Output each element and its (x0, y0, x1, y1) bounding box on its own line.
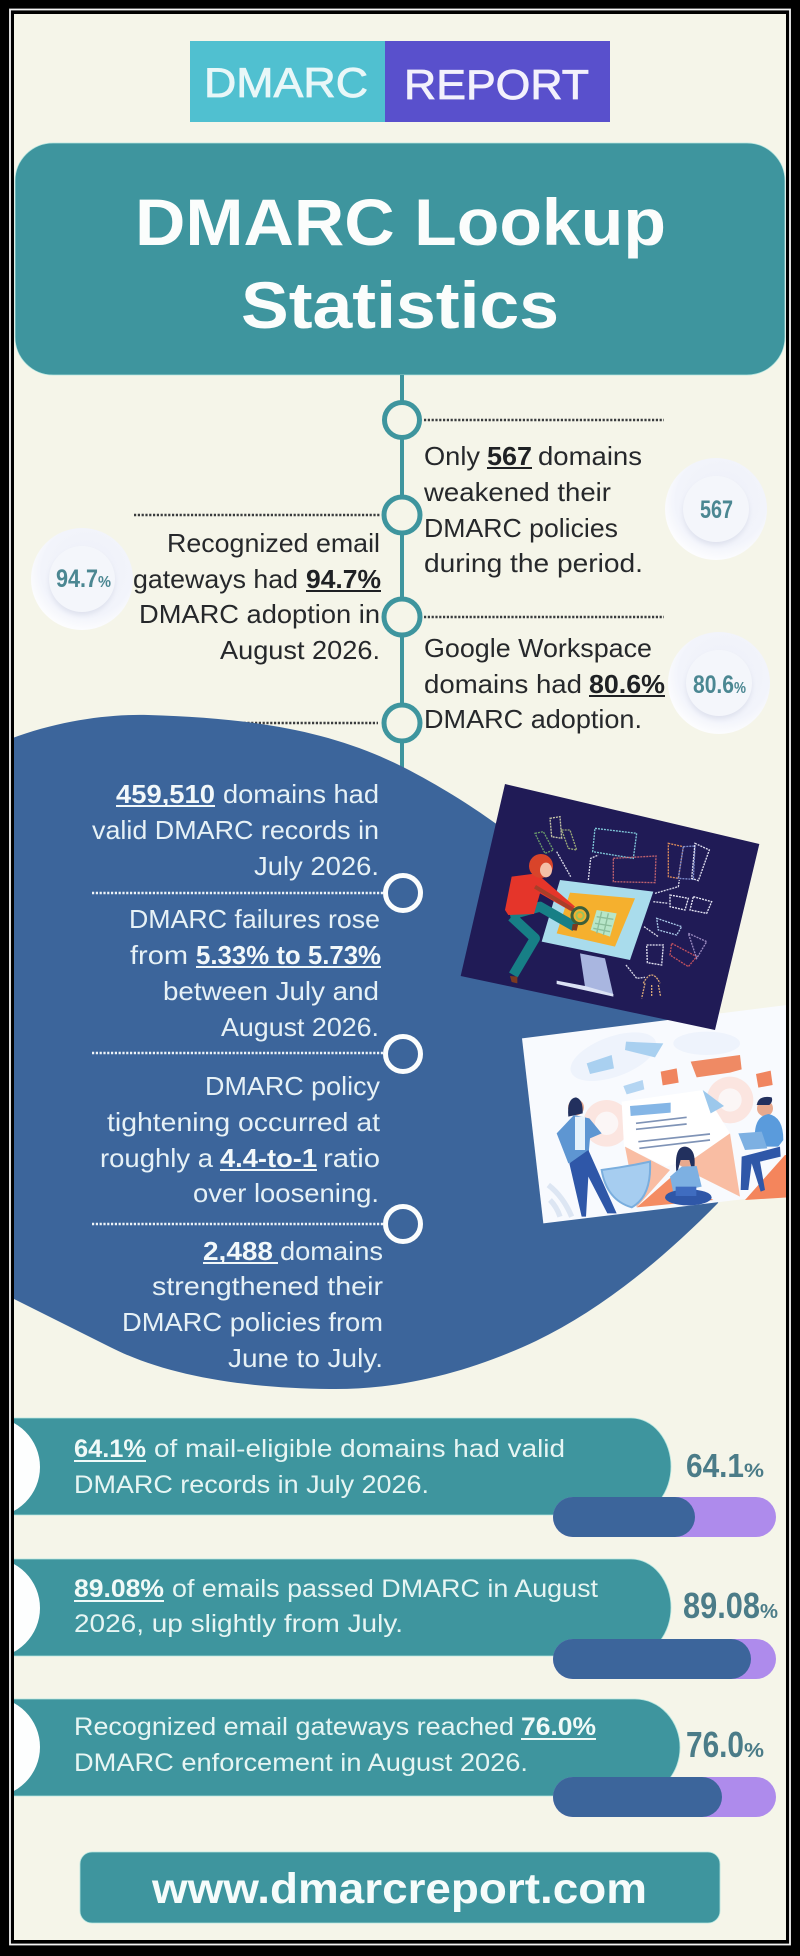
man on box (738, 1097, 783, 1192)
stat bar 1 (0, 1417, 671, 1517)
title: Statistics (241, 268, 559, 342)
bullet marker (0, 1697, 40, 1797)
bullet marker (0, 1417, 40, 1517)
stat: 567 domains weakened: 567 (487, 441, 532, 471)
stat: 80.6% Google Workspace: domains had (424, 669, 582, 699)
timeline in blue panel (92, 876, 420, 1242)
plate: 80.6%: % (734, 680, 746, 697)
stat: 2,488 strengthened: domains (280, 1236, 383, 1266)
progress bar 89.08% (553, 1639, 776, 1679)
stat: 459,510 valid records: domains had (223, 779, 379, 809)
stat bar 1: DMARC records in July 2026. (74, 1471, 429, 1499)
stat: 80.6% Google Workspace: Google Workspace (424, 633, 652, 663)
stat: DMARC failures rose: DMARC failures rose (129, 904, 380, 934)
timeline upper (134, 375, 664, 775)
value label 89.08%: % (760, 1601, 778, 1623)
stat: tightening ratio: ratio (323, 1143, 380, 1173)
stat bar 1: of mail-eligible domains had valid (154, 1435, 565, 1463)
stat: tightening ratio: 4.4-to-1 (220, 1143, 317, 1173)
stat: 459,510 valid records: 459,510 (116, 779, 215, 809)
illustration: team and email security (522, 1003, 800, 1223)
plate: 94.7% (31, 528, 133, 630)
stat bar 3: Recognized email gateways reached (74, 1713, 514, 1741)
stat bar 3: 76.0% (521, 1713, 596, 1741)
woman standing (557, 1097, 617, 1217)
stat: 94.7% gateways adoption: August 2026. (220, 635, 380, 665)
logo: REPORT (404, 61, 589, 108)
stat: 2,488 strengthened: DMARC policies from (122, 1307, 383, 1337)
stat: 2,488 strengthened: strengthened their (152, 1271, 383, 1301)
value label 64.1%: 64.1 (686, 1447, 744, 1484)
stat: DMARC failures rose: August 2026. (221, 1012, 379, 1042)
stat: 94.7% gateways adoption: Recognized email (167, 528, 380, 558)
stat: DMARC failures rose (129, 904, 381, 1042)
stat bar 2: 89.08% (74, 1575, 164, 1603)
stat bar 3: DMARC enforcement in August 2026. (74, 1749, 528, 1777)
stat: 2,488 strengthened (122, 1236, 383, 1373)
progress bar 64.1% (553, 1497, 776, 1537)
stat: tightening ratio: roughly a (100, 1143, 214, 1173)
plate: 80.6%: 80.6 (693, 671, 734, 699)
title: DMARC Lookup (135, 185, 666, 259)
stat: 94.7% gateways adoption: 94.7% (306, 564, 381, 594)
plate: 80.6% (668, 632, 770, 734)
progress bar 76.0% (553, 1777, 776, 1817)
value label 64.1%: % (744, 1461, 764, 1482)
plate: 94.7%: % (98, 574, 111, 591)
stat bar 2: 2026, up slightly from July. (74, 1610, 403, 1638)
monitor (542, 880, 653, 997)
logo: DMARC (204, 59, 368, 106)
stat: 567 domains weakened: Only (424, 441, 480, 471)
bullet marker (0, 1558, 40, 1658)
stat: 94.7% gateways adoption: gateways had (133, 564, 298, 594)
value label 76.0%: 76.0 (686, 1724, 744, 1765)
stat: 94.7% gateways adoption: DMARC adoption in (139, 599, 380, 629)
stat: 459,510 valid records: valid DMARC records in (92, 815, 379, 845)
stat: 567 domains weakened: domains (538, 441, 642, 471)
plate: 94.7%: 94.7 (56, 565, 98, 593)
stat: 2,488 strengthened: 2,488 (203, 1236, 273, 1266)
stat bar 1: 64.1% (74, 1435, 146, 1463)
stat: 94.7% gateways adoption (133, 528, 381, 665)
stat: 80.6% Google Workspace (424, 633, 665, 734)
stat: tightening ratio: over loosening. (193, 1178, 379, 1208)
stat: tightening ratio: DMARC policy (205, 1071, 380, 1101)
title panel (15, 143, 785, 375)
stat: DMARC failures rose: between July and (163, 976, 379, 1006)
logo (190, 41, 610, 122)
blue panel (10, 715, 740, 1389)
stat: 80.6% Google Workspace: 80.6% (589, 669, 665, 699)
girl sitting (665, 1147, 712, 1205)
hacker figure (505, 854, 588, 983)
value label 89.08%: 89.08 (683, 1585, 760, 1626)
stat: 459,510 valid records (92, 779, 379, 881)
title (135, 185, 666, 342)
stat bar 3 (0, 1697, 680, 1797)
plate: 567: 567 (700, 496, 733, 524)
stat: 567 domains weakened: DMARC policies (424, 513, 618, 543)
stat: tightening ratio: tightening occurred at (107, 1107, 381, 1137)
stat bar 2: of emails passed DMARC in August (172, 1575, 598, 1603)
stat: 459,510 valid records: July 2026. (254, 851, 379, 881)
stat: DMARC failures rose: from (130, 940, 188, 970)
stat: 567 domains weakened: weakened their (423, 477, 611, 507)
stat bar 2 (0, 1558, 671, 1658)
footer url panel: www.dmarcreport.com (151, 1865, 647, 1913)
stat: 567 domains weakened (423, 441, 643, 578)
plate: 567 (665, 458, 767, 560)
footer url panel (80, 1852, 720, 1923)
value label 76.0%: % (744, 1740, 764, 1762)
stat: 80.6% Google Workspace: DMARC adoption. (424, 704, 642, 734)
stat: DMARC failures rose: 5.33% to 5.73% (196, 940, 381, 970)
stat: 567 domains weakened: during the period. (424, 548, 643, 578)
stat: 2,488 strengthened: June to July. (228, 1343, 383, 1373)
illustration: hacker at monitor (461, 784, 759, 1030)
stat: tightening ratio (100, 1071, 381, 1208)
